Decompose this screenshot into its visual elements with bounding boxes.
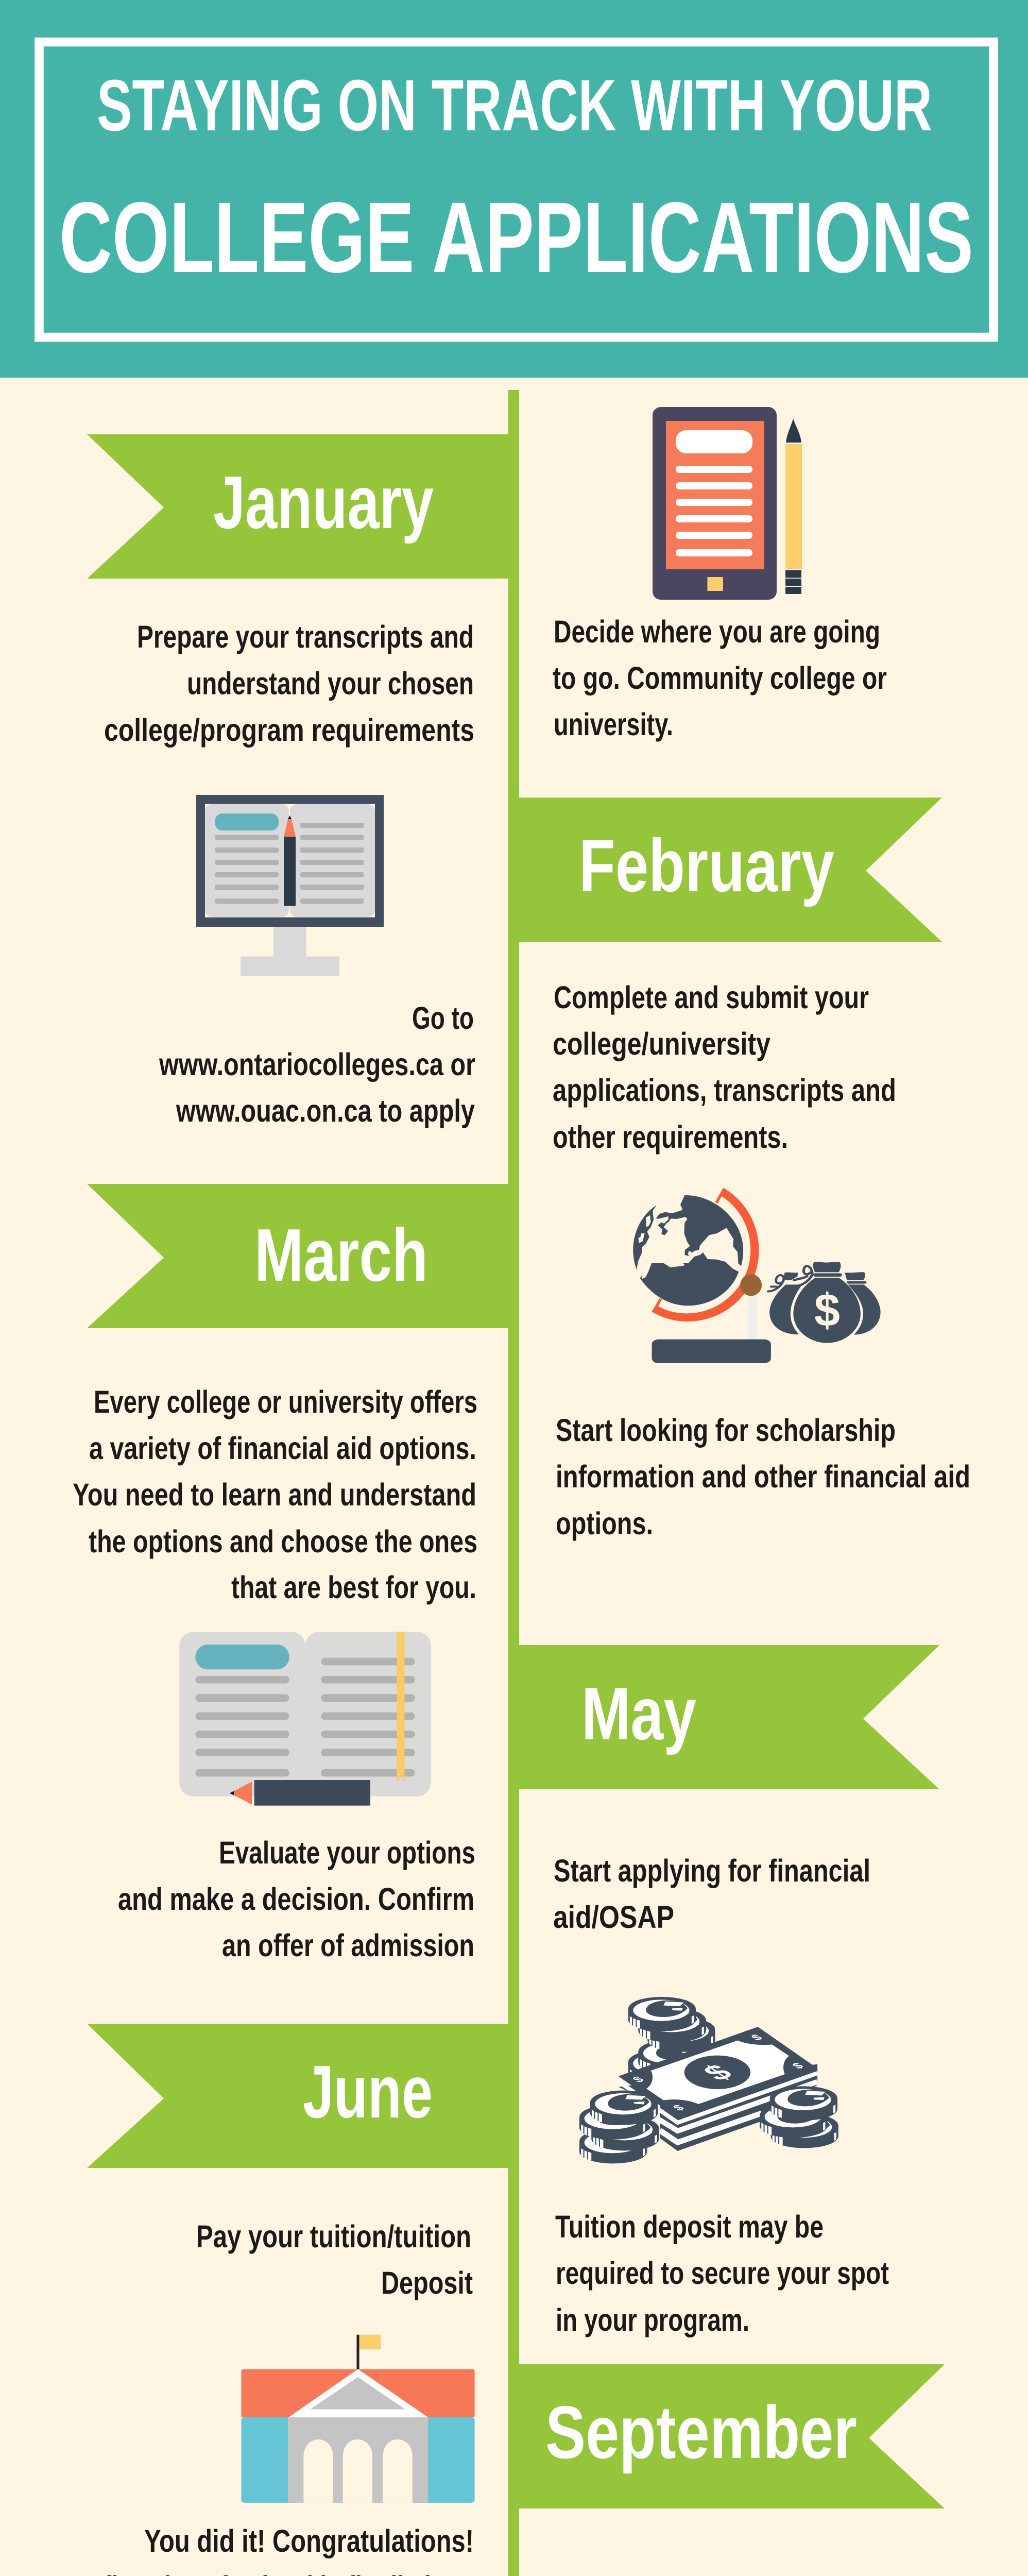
text: June right: in your program. [556, 2302, 749, 2337]
icon: computer monitor [196, 795, 384, 976]
icon: school building [241, 2335, 475, 2503]
text: February left: Go to [412, 1001, 474, 1036]
text: September left: You did it! Congratulations! [144, 2523, 474, 2558]
text: January right: Decide where you are going [554, 614, 880, 649]
dollar sign on money bag: $ [814, 1285, 840, 1336]
text: February left: www.ontariocolleges.ca or [159, 1047, 475, 1082]
text: May left: an offer of admission [222, 1928, 474, 1963]
text: September left [43, 2523, 476, 2576]
banner: January [87, 434, 510, 579]
text: March left: You need to learn and understand [73, 1477, 476, 1512]
text: June left: Pay your tuition/tuition [196, 2219, 471, 2254]
globe stem and base [652, 1274, 771, 1363]
banner: March: March [254, 1213, 428, 1297]
globe continents [633, 1195, 743, 1306]
banner: May: May [581, 1672, 696, 1755]
text: June right [555, 2209, 889, 2337]
icon: open book with pencil [179, 1632, 431, 1806]
text: June left: Deposit [381, 2265, 473, 2300]
text: March left [73, 1384, 477, 1605]
text: May right: Start applying for financial [554, 1853, 870, 1888]
icon: cash stack and coins: $ [695, 2060, 740, 2085]
text: May left: Evaluate your options [219, 1835, 475, 1870]
text: May right [553, 1853, 870, 1935]
banner: February: February [579, 824, 834, 907]
icon: cash stack and coins: $ [670, 2103, 687, 2112]
text: January left: Prepare your transcripts and [137, 619, 474, 654]
text: May left: and make a decision. Confirm [118, 1882, 474, 1917]
icon: tablet and pencil [653, 407, 802, 600]
banner: May [515, 1645, 939, 1789]
text: February right [553, 980, 896, 1155]
text: March right: options. [556, 1506, 653, 1541]
banner: March [87, 1184, 510, 1328]
text: March right: Start looking for scholarship [556, 1413, 896, 1448]
text: January left: understand your chosen [187, 666, 474, 701]
text: February left [159, 1001, 475, 1128]
money bags [768, 1262, 881, 1343]
text: January right [553, 614, 887, 742]
text: March left: that are best for you. [231, 1570, 476, 1605]
text: March left: a variety of financial aid options. [89, 1431, 476, 1466]
text: June right: required to secure your spot [556, 2256, 889, 2291]
text: May left [118, 1835, 475, 1963]
banner: January: January [213, 461, 434, 544]
globe ring [652, 1188, 759, 1321]
text: January right: to go. Community college or [553, 660, 887, 696]
icon: globe and money bags [633, 1188, 881, 1363]
text: June left [196, 2219, 473, 2300]
banner: June: June [303, 2050, 433, 2133]
icon: cash stack and coins: $ [789, 2061, 806, 2071]
text: January right: university. [554, 707, 673, 742]
icon: cash stack and coins: $ [629, 2074, 646, 2084]
text: March right [556, 1413, 970, 1541]
banner: February [515, 798, 942, 942]
text: March left: the options and choose the ones [89, 1524, 477, 1559]
text: June right: Tuition deposit may be [555, 2209, 824, 2244]
banner: June [87, 2024, 510, 2168]
icon: cash stack and coins: $ [748, 2032, 765, 2042]
header band [0, 0, 1028, 378]
text: May right: aid/OSAP [553, 1900, 674, 1935]
text: February right: applications, transcripts and [553, 1073, 896, 1108]
text: February left: www.ouac.on.ca to apply [176, 1093, 475, 1128]
text: February right: college/university [553, 1026, 770, 1061]
banner: September: September [545, 2391, 857, 2474]
banner: September [515, 2364, 945, 2509]
text: February right: other requirements. [553, 1120, 788, 1155]
timeline spine [508, 390, 519, 2576]
text: January left [104, 619, 474, 748]
text: January left: college/program requirements [104, 713, 474, 748]
text: March left: Every college or university offers [94, 1384, 477, 1419]
icon: cash stack and coins [579, 1997, 838, 2163]
text: February right: Complete and submit your [554, 980, 869, 1015]
